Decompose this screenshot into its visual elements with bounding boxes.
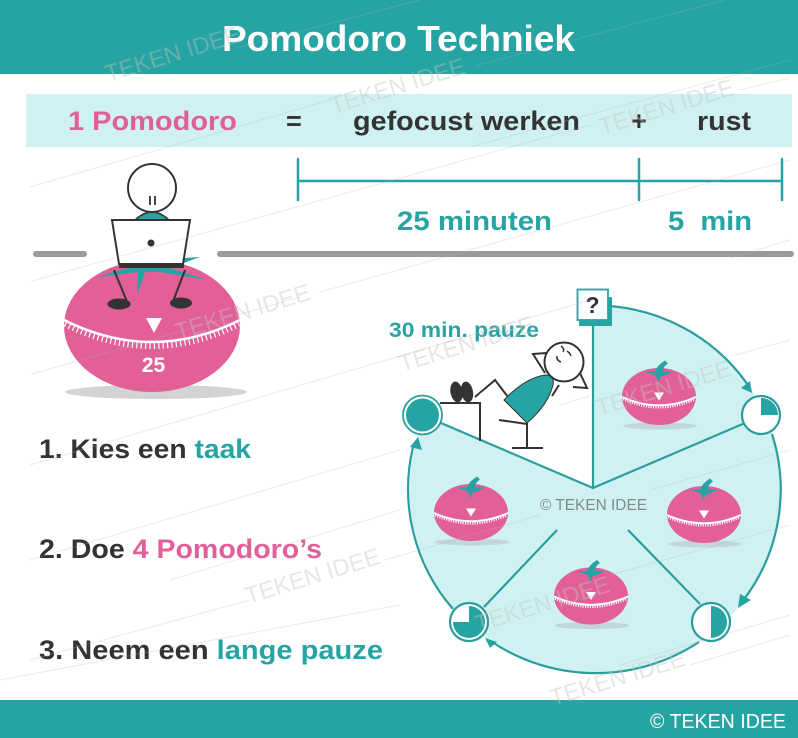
tomato 2 [667,478,742,548]
timeline label: 5 min: 5 min [668,206,752,236]
watermarks: TEKEN IDEE [172,279,313,345]
steps list [39,434,383,665]
watermarks: TEKEN IDEE [547,645,688,711]
watermarks: TEKEN IDEE [596,74,737,140]
tomato 4 [434,476,509,546]
tomato 1 [622,360,697,430]
timeline bracket [298,159,782,200]
equation band [26,94,792,147]
watermarks [102,21,737,711]
watermarks: TEKEN IDEE [396,311,537,377]
footer credit: © TEKEN IDEE [650,711,786,733]
clock: full [403,396,442,434]
watermarks: TEKEN IDEE [593,355,734,421]
desk line [36,251,791,257]
arrowheads [410,381,752,648]
clock: three quarters [450,603,488,641]
cycle outline [408,305,781,673]
watermarks: TEKEN IDEE [102,21,243,87]
watermarks: TEKEN IDEE [327,53,468,119]
large tomato [64,257,247,399]
task icon [578,290,612,326]
spokes [441,325,745,607]
person with laptop [108,164,192,310]
step 1: 1. Kies een taak [39,434,252,464]
equation band: + [631,106,647,136]
equation band: = [286,106,302,136]
tomato 3 [554,560,629,629]
watermarks: TEKEN IDEE [472,571,613,637]
disc segments [410,305,782,673]
clock: half [692,603,730,641]
cycle diagram [403,290,782,673]
equation band: gefocust werken [353,106,580,136]
footer bar [0,700,798,738]
timeline label: 25 minuten: 25 minuten [397,206,552,236]
clock: quarter [742,396,780,434]
step 3: 3. Neem een lange pauze [39,635,383,665]
title: Pomodoro Techniek [222,18,576,59]
center credit: © TEKEN IDEE [540,497,647,514]
step 2: 2. Doe 4 Pomodoro’s [39,534,322,564]
pause label: 30 min. pauze [389,319,539,342]
task icon: ? [585,292,600,318]
watermarks: TEKEN IDEE [242,543,383,609]
large tomato: 25 [142,354,165,377]
header bar [0,0,798,74]
reclining figure [440,342,587,448]
equation band: 1 Pomodoro [68,106,237,136]
equation band: rust [697,106,751,136]
